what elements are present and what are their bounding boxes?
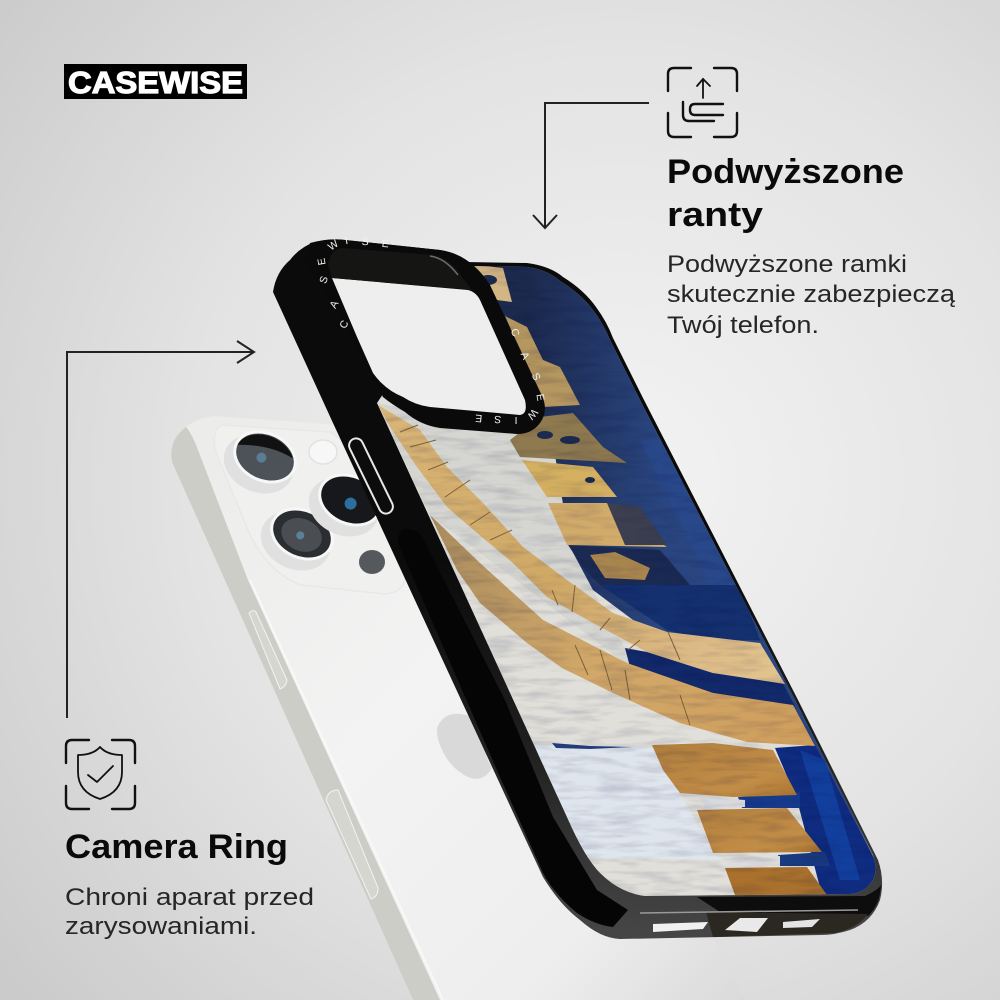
case bottom band [697, 885, 881, 916]
upper grey white paint [377, 403, 630, 667]
side slot [398, 529, 628, 927]
ring lettering: C [337, 318, 352, 331]
ring lettering: W [326, 238, 341, 253]
text: camera ring description [65, 884, 314, 940]
apple logo [437, 714, 495, 779]
navy streak between copper [738, 792, 800, 808]
gold patch 2 dark overlay [607, 503, 667, 545]
white streak [700, 797, 745, 808]
ring lettering: E [316, 257, 329, 266]
ring highlight [430, 256, 458, 275]
ring lettering: E [381, 238, 389, 250]
lens: bottom [251, 495, 342, 581]
ring lettering: E [533, 393, 546, 402]
gold patch 2 [548, 503, 667, 547]
ring lettering: S [361, 236, 369, 248]
ring lettering: E [475, 412, 483, 424]
ring cutout [332, 278, 526, 415]
text: raised edges description: Twój telefon. [667, 312, 819, 339]
heading: Podwyższone ranty [667, 153, 904, 234]
copper patch 3 [725, 867, 827, 895]
logo: CASEWISE: CASEWISE [68, 65, 243, 100]
ring lettering: A [518, 350, 532, 361]
side buttons [249, 611, 378, 899]
side button [347, 436, 395, 516]
bright blue streak upper [640, 440, 735, 585]
ring frame [305, 239, 545, 434]
lens: top [214, 418, 305, 504]
lens: right [299, 461, 390, 547]
black phone case [273, 239, 882, 939]
copper patch 2 [697, 808, 822, 853]
copper patch 1 [652, 743, 797, 797]
white streak lower [778, 856, 780, 866]
case shell [273, 239, 882, 939]
heading: Podwyższone ranty: Podwyższone [667, 153, 904, 191]
dark lower navy streaks [600, 585, 760, 640]
paint texture [370, 260, 890, 900]
heading: Podwyższone ranty: ranty [667, 196, 763, 234]
icon: raised edges [668, 68, 737, 137]
white paint base [370, 260, 890, 900]
dark navy block [568, 545, 690, 585]
ring lettering: I [515, 414, 517, 426]
gold patch 1 [522, 460, 617, 497]
camera ring [305, 235, 546, 434]
text: camera ring description: Chroni aparat przed [65, 884, 314, 911]
phone body [171, 416, 745, 1000]
painted case back [370, 260, 890, 900]
navy streak lower [778, 852, 830, 866]
ring lettering: A [327, 299, 341, 311]
arrow: top pointing down to raised edges [533, 103, 649, 228]
thin blue streak [552, 743, 632, 749]
white phone [171, 416, 745, 1000]
flash [309, 440, 337, 464]
ring lettering: S [317, 275, 331, 285]
text: camera ring description: zarysowaniami. [65, 913, 257, 940]
navy upper region [480, 262, 880, 870]
bottom port: right [783, 919, 820, 928]
inner ring wall [328, 248, 472, 290]
heading: Camera Ring: Camera Ring [65, 828, 288, 866]
pale gold top [474, 266, 512, 302]
gold patch 3 [590, 552, 650, 580]
arrow: left pointing right to camera ring [67, 341, 254, 718]
gold speckles [479, 275, 595, 483]
bottom port: center [725, 918, 768, 932]
ring lettering: C [508, 327, 522, 339]
phone side edge [171, 427, 440, 1000]
ring lettering: I [344, 235, 349, 247]
bright edge line [640, 910, 858, 913]
sensor [359, 550, 385, 574]
bright blue streak [800, 750, 860, 880]
ring lettering [316, 235, 546, 426]
icon: shield [66, 740, 135, 809]
charging edge over background [706, 912, 868, 937]
side edge highlight [250, 580, 443, 1000]
text: raised edges description [667, 251, 956, 339]
text: raised edges description: Podwyższone ramki [667, 251, 907, 278]
lower blue white area [535, 745, 723, 860]
gold band lower [430, 515, 815, 746]
ring lettering: S [529, 371, 543, 382]
gold splatter under ring [510, 413, 627, 463]
navy band between gold [625, 648, 795, 706]
camera plateau [214, 425, 405, 594]
ring lettering: S [494, 413, 502, 425]
text: raised edges description: skutecznie zabezpieczą [667, 281, 956, 308]
bottom port: left [653, 922, 708, 932]
ring lettering: W [524, 406, 540, 422]
gold beside ring [505, 316, 580, 407]
gold band crack lines [400, 425, 690, 725]
gold band upper [378, 405, 785, 684]
navy lower right [775, 745, 880, 895]
